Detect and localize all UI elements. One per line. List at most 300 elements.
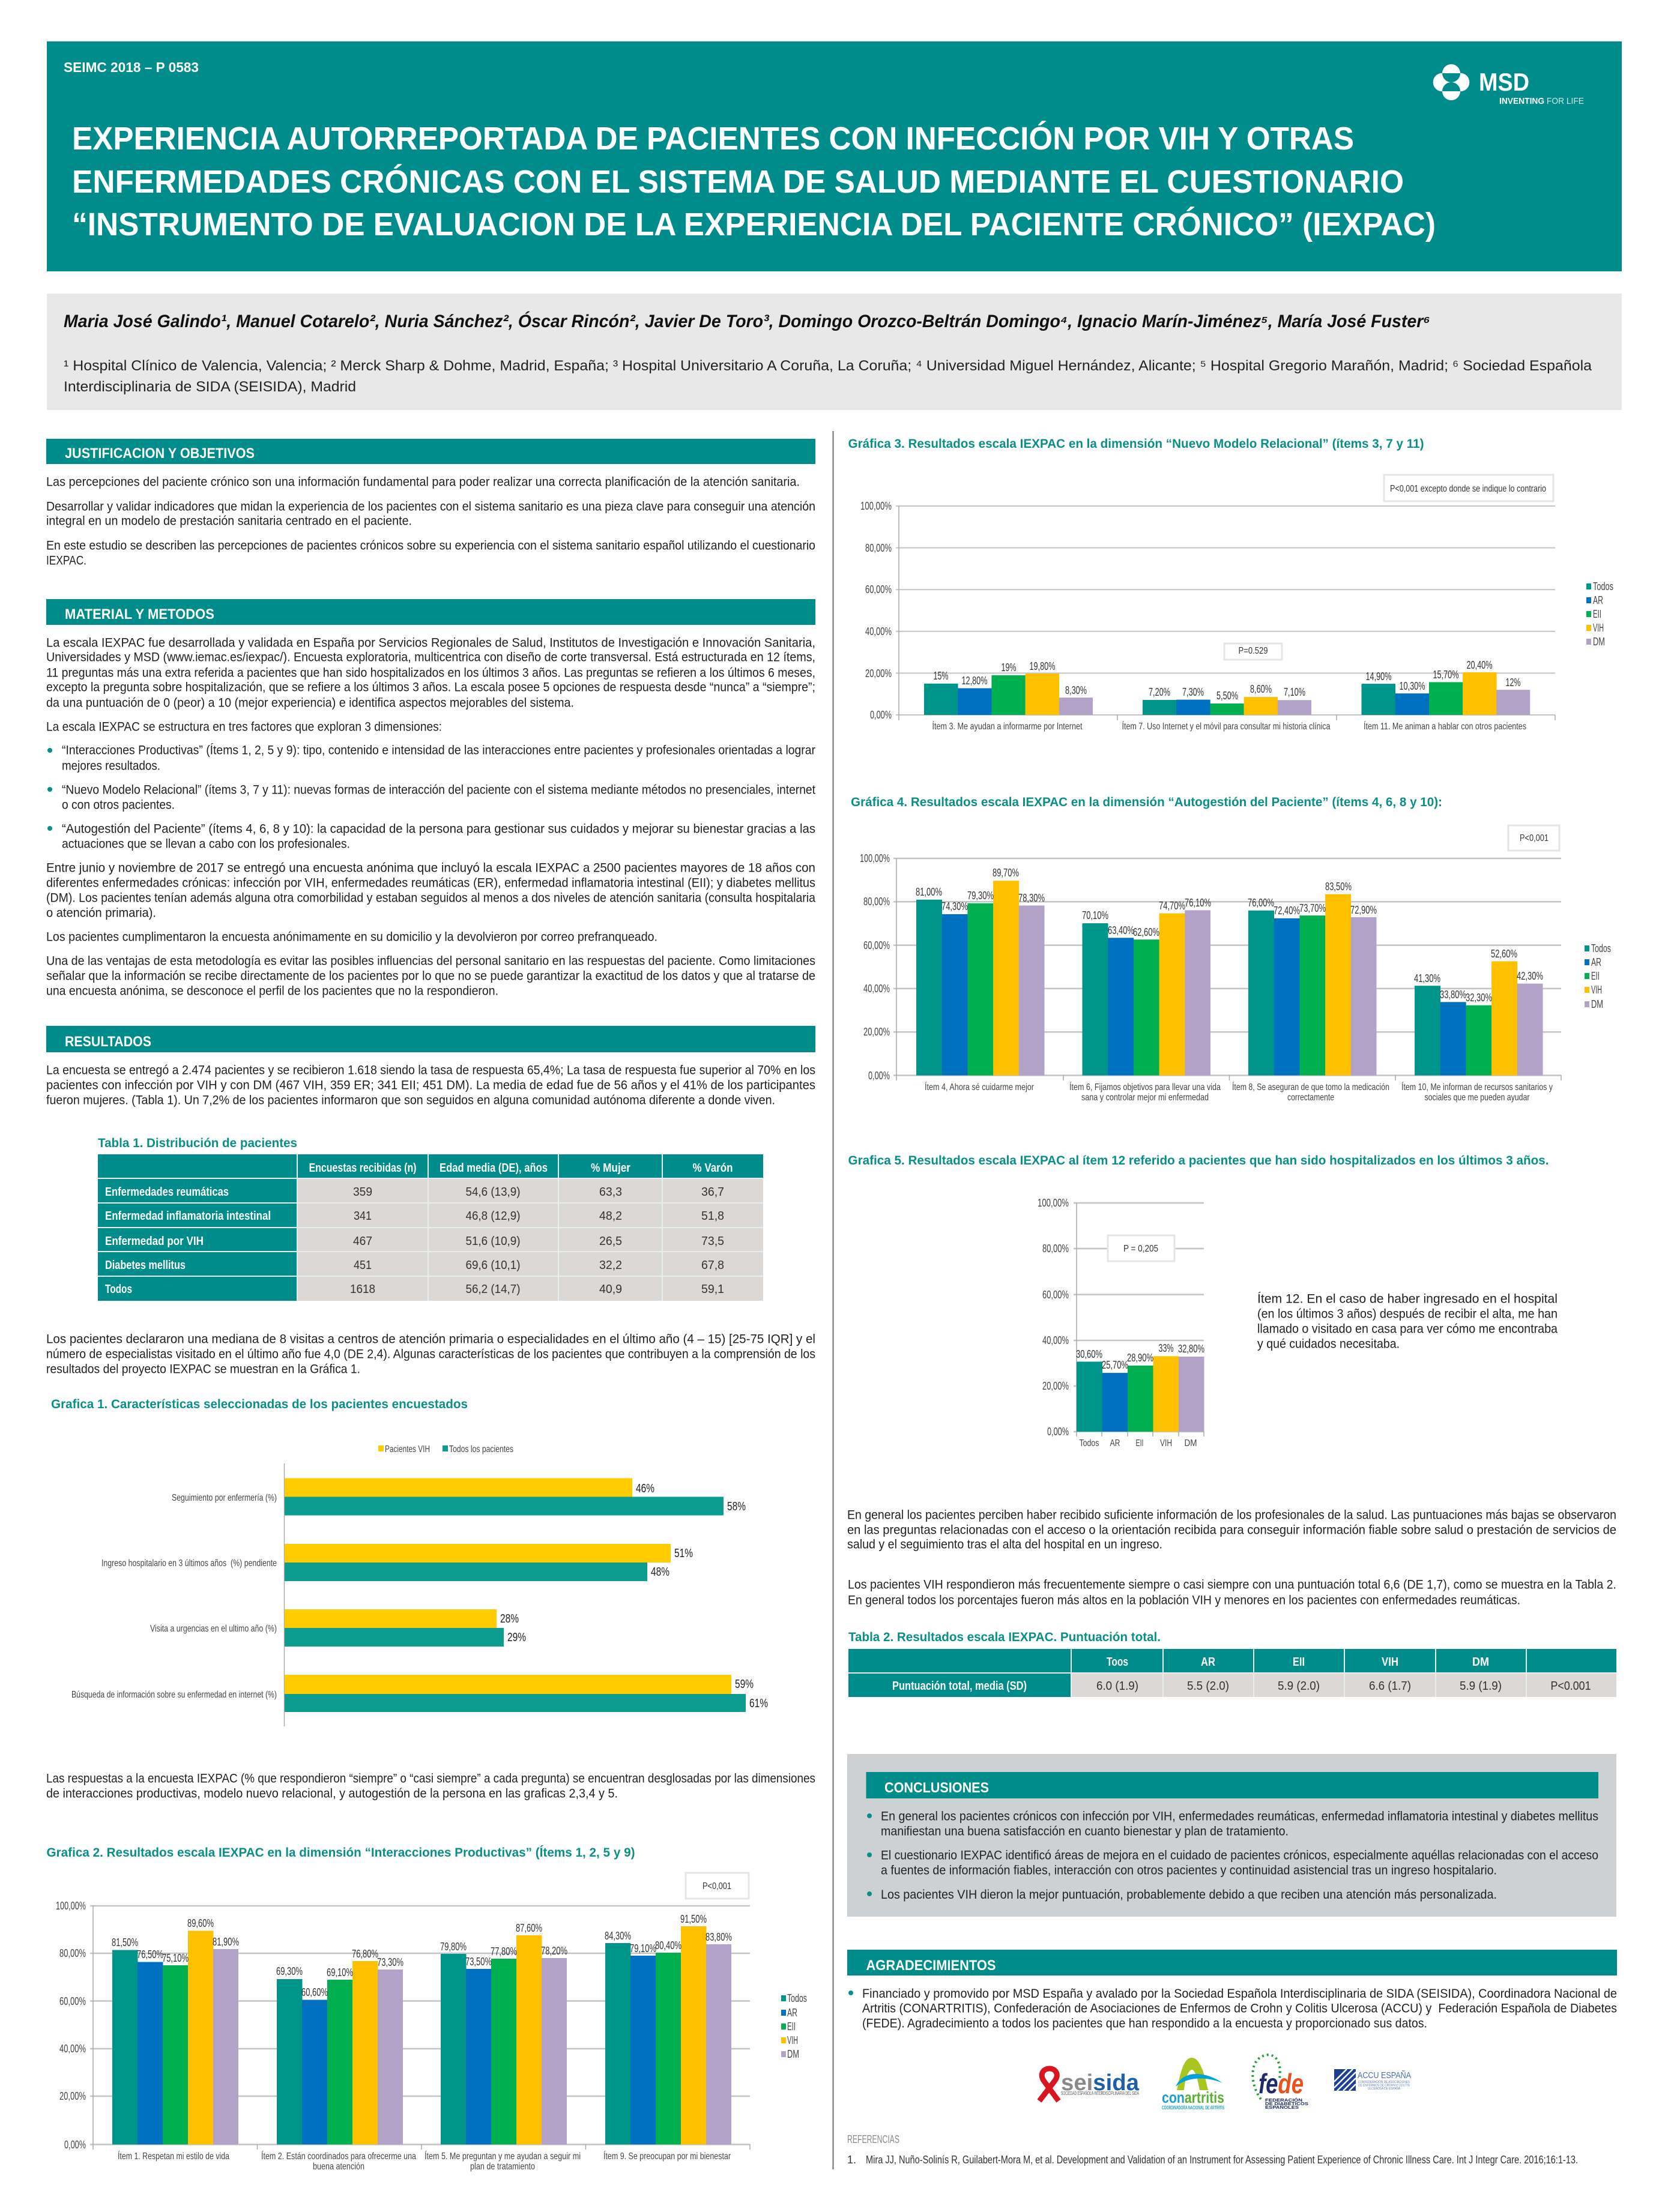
legend: AR bbox=[1591, 956, 1601, 968]
group: item 8: 73,70% bbox=[1299, 902, 1326, 914]
group: item 11: 15,70% bbox=[1433, 669, 1459, 681]
table 1: 26,5 bbox=[599, 1235, 622, 1248]
axes and grid: 100,00% bbox=[1038, 1197, 1069, 1209]
group: item 11 bbox=[1362, 659, 1530, 732]
legend bbox=[1585, 942, 1611, 1010]
acknowledgement text bbox=[848, 1987, 1617, 2030]
group: item 5: 79,80% bbox=[440, 1941, 467, 1953]
group: item 3: 19% bbox=[1002, 661, 1016, 674]
logo: accu españa: ACCU ESPAÑA bbox=[1358, 2070, 1411, 2081]
chart 2 title: Grafica 2. Resultados escala IEXPAC en la dimensión “Interacciones Productivas” (Ítems 1, 2, 5 y 9) bbox=[47, 1846, 635, 1860]
table 1: 467 bbox=[353, 1235, 372, 1248]
logo: seisida: SOCIEDAD ESPAÑOLA INTERDISCIPLINARIA DEL SIDA bbox=[1061, 2091, 1139, 2096]
group: item 10: 42,30% bbox=[1517, 970, 1543, 982]
table 2 bbox=[848, 1649, 1616, 1697]
bullet list: dimensions: “Nuevo Modelo Relacional” (ítems 3, 7 y 11): nuevas formas de interacción del paciente con el sistema mediante métodos no presenciales, internet bbox=[62, 783, 815, 797]
legend: EII bbox=[1593, 608, 1601, 620]
panel: resultados bbox=[46, 1026, 815, 1107]
category: internet bbox=[71, 1675, 768, 1712]
text: responses paragraph: Las respuestas a la encuesta IEXPAC (% que respondieron “siempre” o “casi siempre” a cada pregunta) se encuentran desglosadas por las dimensiones bbox=[46, 1772, 815, 1785]
group: item 2: 76,80% bbox=[352, 1948, 378, 1960]
conclusions bullets: manifiestan una buena satisfacción en cuanto bienestar y plan de tratamiento. bbox=[881, 1825, 1289, 1838]
chart 3 title: Gráfica 3. Resultados escala IEXPAC en la dimensión “Nuevo Modelo Relacional” (ítems 3, 7 y 11) bbox=[848, 437, 1424, 451]
axes and grid: 20,00% bbox=[1042, 1380, 1069, 1392]
text: results discussion: salud y el seguimiento tras el alta del hospital en un ingreso. bbox=[847, 1538, 1162, 1551]
group: item 10: sociales que me pueden ayudar bbox=[1424, 1092, 1530, 1103]
category: seguimiento: 46% bbox=[636, 1482, 654, 1495]
bullet list: dimensions bbox=[47, 743, 815, 851]
group: item 9: Ítem 9. Se preocupan por mi bienestar bbox=[603, 2150, 731, 2162]
body text: IEXPAC. bbox=[46, 553, 86, 568]
header banner bbox=[47, 41, 1622, 271]
p value box bbox=[686, 1873, 749, 1899]
group: item 9: 80,40% bbox=[655, 1939, 681, 1951]
acknowledgement text: (FEDE). Agradecimiento a todos los pacientes que han respondido a la encuesta y proporcionado sus datos. bbox=[862, 2017, 1427, 2030]
axes and grid: 60,00% bbox=[59, 1995, 86, 2007]
group: item 7: 5,50% bbox=[1216, 690, 1238, 702]
category: urgencias: 29% bbox=[507, 1631, 526, 1644]
panel: conclusiones bbox=[847, 1754, 1616, 1917]
body text: Desarrollar y validar indicadores que midan la experiencia de los pacientes con el sistema sanitario es una pieza clave para conseguir una atención bbox=[46, 499, 815, 514]
logo: accu españa: DE ENFERMOS DE CROHN Y COLITIS bbox=[1358, 2084, 1410, 2088]
group: item 5: plan de tratamiento bbox=[470, 2162, 535, 2172]
affiliations bbox=[64, 358, 1592, 395]
group: item 8 bbox=[1232, 881, 1389, 1103]
legend: DM bbox=[1593, 636, 1605, 648]
legend: Pacientes VIH bbox=[385, 1444, 430, 1454]
table 1: 359 bbox=[353, 1186, 372, 1199]
category: urgencias: 28% bbox=[500, 1612, 519, 1626]
group: item 3: 8,30% bbox=[1065, 684, 1087, 696]
body text: La encuesta se entregó a 2.474 pacientes y se recibieron 1.618 siendo la tasa de respuesta 65,4%; La tasa de respuesta fue superior al 70% en los bbox=[46, 1064, 815, 1077]
references bbox=[847, 2133, 1578, 2166]
category: seguimiento bbox=[172, 1478, 746, 1515]
references: REFERENCIAS bbox=[847, 2133, 899, 2145]
category: urgencias bbox=[150, 1609, 526, 1647]
group: item 5: 77,80% bbox=[491, 1945, 517, 1957]
table 1 title: Tabla 1. Distribución de pacientes bbox=[98, 1136, 297, 1150]
group: item 10: 52,60% bbox=[1491, 948, 1517, 960]
text: results discussion: Los pacientes VIH respondieron más frecuentemente siempre o casi siempre con una puntuación total 6,6 (DE 1,7), como se muestra en la Tabla 2. bbox=[848, 1578, 1616, 1592]
heading bbox=[866, 1772, 1598, 1798]
text: responses paragraph: de interacciones productivas, modelo nuevo relacional, y autogestión de la persona en las graficas 2,3,4 y 5. bbox=[46, 1786, 618, 1801]
text: results discussion: En general los pacientes perciben haber recibido suficiente información de los profesionales de la salud. Las puntuaciones más bajas se observaron bbox=[847, 1508, 1616, 1522]
group: item 11: 12% bbox=[1506, 677, 1520, 689]
group: item 5: 87,60% bbox=[516, 1922, 542, 1934]
table 1: 67,8 bbox=[701, 1259, 724, 1272]
group: item 4: 89,70% bbox=[993, 867, 1019, 879]
conclusions bullets: a fuentes de información fiables, interacción con otros pacientes y continuidad asistencial tras un ingreso hospitalario. bbox=[881, 1863, 1497, 1878]
axes and grid: 20,00% bbox=[59, 2090, 86, 2102]
p value box bbox=[1384, 475, 1553, 501]
group: item 2: 73,30% bbox=[377, 1956, 403, 1968]
logo: accu españa: ULCEROSA DE ESPAÑA bbox=[1368, 2087, 1400, 2091]
group: item 9: 83,80% bbox=[706, 1931, 732, 1943]
heading: MATERIAL Y METODOS bbox=[65, 606, 214, 622]
group: item 7: 7,10% bbox=[1284, 686, 1305, 698]
table 1: % Mujer bbox=[591, 1162, 630, 1175]
axes and grid bbox=[56, 1900, 750, 2151]
group: item 4: 79,30% bbox=[967, 890, 994, 902]
legend: DM bbox=[787, 2048, 799, 2060]
group: item 6: Ítem 6, Fijamos objetivos para llevar una vida bbox=[1069, 1081, 1221, 1092]
table 1: 56,2 (14,7) bbox=[466, 1283, 520, 1296]
panel: agradecimientos bbox=[847, 1950, 1617, 2030]
chart 4 bbox=[860, 825, 1611, 1103]
text: visits paragraph: número de especialistas visitado en el último año fue 4,0 (DE 2,4). Algunas características de los pacientes que contribuyen a la comprensión de los bbox=[46, 1347, 815, 1361]
group: item 6: 63,40% bbox=[1108, 924, 1134, 936]
methods paragraphs: una encuesta anónima, se desconoce el perfil de los pacientes que no la respondieron. bbox=[46, 984, 498, 998]
group: item 1: 81,50% bbox=[112, 1936, 138, 1948]
bars: AR bbox=[1110, 1438, 1120, 1448]
group: item 4 bbox=[916, 867, 1045, 1092]
axes and grid bbox=[860, 500, 1555, 721]
table 1: 36,7 bbox=[701, 1186, 724, 1199]
authors panel bbox=[47, 294, 1622, 410]
conference code: SEIMC 2018 – P 0583 bbox=[64, 59, 199, 75]
group: item 1: 75,10% bbox=[162, 1952, 189, 1964]
category: internet: Búsqueda de información sobre su enfermedad en internet (%) bbox=[71, 1690, 277, 1700]
group: item 5: Ítem 5. Me preguntan y me ayudan a seguir mi bbox=[425, 2150, 581, 2162]
legend: AR bbox=[787, 2007, 797, 2019]
logo: fede bbox=[1253, 2055, 1308, 2110]
group: item 10: 32,30% bbox=[1466, 992, 1492, 1004]
table 2: 5.5 (2.0) bbox=[1187, 1680, 1229, 1693]
group: item 2 bbox=[261, 1948, 416, 2172]
text: responses paragraph bbox=[46, 1772, 815, 1801]
bars: 25,70% bbox=[1102, 1359, 1128, 1371]
table 1: 54,6 (13,9) bbox=[466, 1186, 520, 1199]
table 1: 32,2 bbox=[599, 1259, 622, 1272]
p value box bbox=[1108, 1235, 1174, 1261]
legend: Todos los pacientes bbox=[449, 1444, 513, 1454]
group: item 1: 76,50% bbox=[137, 1948, 163, 1960]
table 1: 451 bbox=[354, 1259, 372, 1272]
legend: AR bbox=[1593, 594, 1603, 606]
table 2: 6.6 (1.7) bbox=[1369, 1680, 1411, 1693]
group: item 8: correctamente bbox=[1287, 1092, 1334, 1103]
table 1: Enfermedad inflamatoria intestinal bbox=[105, 1210, 271, 1223]
group: item 3 bbox=[924, 660, 1093, 732]
axes and grid: 40,00% bbox=[863, 983, 890, 995]
group: item 7 bbox=[1122, 683, 1331, 732]
axes and grid: 20,00% bbox=[863, 1026, 890, 1038]
table 1: Enfermedades reumáticas bbox=[105, 1186, 229, 1199]
body text: Las percepciones del paciente crónico son una información fundamental para poder realizar una correcta planificación de la atención sanitaria. bbox=[46, 475, 800, 489]
bullet list: dimensions: o con otros pacientes. bbox=[62, 798, 175, 812]
text: item 12 description bbox=[1257, 1292, 1558, 1351]
icon: MSD logo: INVENTING FOR LIFE bbox=[1499, 96, 1584, 106]
body text bbox=[46, 475, 815, 568]
body text: integral en un modelo de prestación sanitaria centrado en el paciente. bbox=[46, 514, 412, 528]
group: item 8: Ítem 8, Se aseguran de que tomo la medicación bbox=[1232, 1081, 1389, 1092]
text: visits paragraph bbox=[46, 1333, 815, 1376]
axes and grid: 40,00% bbox=[59, 2043, 86, 2055]
heading bbox=[46, 439, 815, 464]
heading: RESULTADOS bbox=[65, 1034, 151, 1050]
group: item 9: 91,50% bbox=[680, 1913, 707, 1925]
methods paragraphs: señalar que la información se recibe directamente de los pacientes por lo que no se puede garantizar la exactitud de los datos y que al tratarse de bbox=[46, 969, 815, 983]
legend: EII bbox=[787, 2021, 796, 2033]
table 2: AR bbox=[1201, 1656, 1215, 1669]
body text: pacientes con infección por VIH y con DM (467 VIH, 359 ER; 341 EII; 451 DM). La media de edad fue de 56 años y el 41% de los participantes bbox=[46, 1078, 815, 1092]
axes and grid: 80,00% bbox=[865, 542, 892, 554]
table 2: Toos bbox=[1107, 1656, 1128, 1669]
category: urgencias: Visita a urgencias en el ultimo año (%) bbox=[150, 1624, 277, 1634]
table 1: Enfermedad por VIH bbox=[105, 1235, 204, 1248]
body text: La escala IEXPAC fue desarrollada y validada en España por Servicios Regionales de Salud, Institutos de Investigación e Innovación Sanitaria, bbox=[46, 636, 815, 649]
group: item 10: 41,30% bbox=[1414, 972, 1440, 984]
axes and grid: 0,00% bbox=[868, 1070, 890, 1082]
group: item 3: Ítem 3. Me ayudan a informarme por Internet bbox=[932, 720, 1083, 732]
logo: accu españa: CONFEDERACIÓN DE ASOCIACIONES bbox=[1358, 2080, 1410, 2084]
group: item 10: 33,80% bbox=[1440, 989, 1466, 1001]
group: item 8: 72,40% bbox=[1274, 905, 1300, 917]
table 1: 59,1 bbox=[701, 1283, 724, 1296]
bullet list: dimensions: “Autogestión del Paciente” (ítems 4, 6, 8 y 10): la capacidad de la persona para gestionar sus cuidados y mejorar su bienestar gracias a las bbox=[62, 822, 815, 836]
p value box: P<0,001 bbox=[1520, 833, 1549, 843]
axes and grid: 20,00% bbox=[865, 668, 892, 680]
legend: Todos bbox=[787, 1992, 807, 2004]
group: item 4: Ítem 4, Ahora sé cuidarme mejor bbox=[925, 1081, 1035, 1092]
logo: fede: fede bbox=[1259, 2068, 1304, 2099]
title: ENFERMEDADES CRÓNICAS CON EL SISTEMA DE SALUD MEDIANTE EL CUESTIONARIO bbox=[72, 164, 1404, 200]
axes and grid: 0,00% bbox=[870, 709, 892, 721]
bars: 28,90% bbox=[1127, 1352, 1153, 1364]
heading bbox=[46, 599, 815, 625]
bullet list: dimensions: mejores resultados. bbox=[62, 759, 160, 773]
table 1: Diabetes mellitus bbox=[105, 1259, 186, 1272]
table 1: 40,9 bbox=[599, 1283, 622, 1296]
table 1: 48,2 bbox=[599, 1210, 622, 1223]
legend: Todos bbox=[1593, 580, 1613, 592]
legend bbox=[378, 1444, 513, 1454]
methods paragraphs: o atención primaria). bbox=[46, 906, 156, 920]
table 1: 51,8 bbox=[701, 1210, 724, 1223]
legend: Todos bbox=[1591, 942, 1611, 954]
chart 2 bbox=[56, 1873, 807, 2172]
group: item 5 bbox=[425, 1922, 581, 2172]
table 2: P<0.001 bbox=[1550, 1680, 1591, 1693]
chart 5 bbox=[1038, 1197, 1204, 1448]
bullet list: dimensions: actuaciones que se llevan a cabo con los profesionales. bbox=[62, 837, 350, 851]
table 1: Edad media (DE), años bbox=[440, 1162, 548, 1175]
bars bbox=[1076, 1342, 1204, 1448]
methods paragraphs: Los pacientes cumplimentaron la encuesta anónimamente en su domicilio y la devolvieron por correo prefranqueado. bbox=[46, 930, 657, 944]
group: item 9 bbox=[603, 1913, 732, 2162]
body text: fueron mujeres. (Tabla 1). Un 7,2% de los pacientes informaron que son seguidos en alguna comunidad autónoma diferente a donde viven. bbox=[46, 1094, 775, 1107]
p value box: P = 0,205 bbox=[1123, 1244, 1158, 1254]
heading: CONCLUSIONES bbox=[884, 1780, 989, 1796]
logo: fede: ESPAÑOLES bbox=[1265, 2105, 1299, 2110]
p value box: P<0,001 excepto donde se indique lo contrario bbox=[1390, 484, 1546, 494]
group: item 3: 19,80% bbox=[1029, 660, 1056, 672]
bars: 32,80% bbox=[1178, 1343, 1204, 1355]
acknowledgement text: Artritis (CONARTRITIS), Confederación de Asociaciones de Enfermos de Crohn y Colitis Ulcerosa (ACCU) y Federación Española de Diabetes bbox=[862, 2001, 1617, 2016]
text: item 12 description: (en los últimos 3 años) después de recibir el alta, me han bbox=[1257, 1307, 1558, 1321]
axes and grid: 40,00% bbox=[1042, 1334, 1069, 1346]
group: item 11: Ítem 11. Me animan a hablar con otros pacientes bbox=[1364, 720, 1526, 732]
group: item 1 bbox=[112, 1917, 239, 2162]
legend bbox=[781, 1992, 807, 2060]
group: item 7: 7,20% bbox=[1149, 686, 1170, 698]
axes and grid: 60,00% bbox=[863, 939, 890, 951]
group: item 6: 74,70% bbox=[1159, 900, 1185, 912]
title bbox=[72, 121, 1436, 243]
axes and grid bbox=[860, 852, 1561, 1082]
axes and grid: 60,00% bbox=[1042, 1289, 1069, 1301]
p value box: P<0,001 bbox=[703, 1881, 731, 1891]
category: ingreso: 48% bbox=[651, 1566, 669, 1579]
group: item 4: 81,00% bbox=[916, 886, 942, 898]
text: results discussion: En general todos los porcentajes fueron más altos en la población VIH y menores en los pacientes con enfermedades reumáticas. bbox=[848, 1593, 1520, 1608]
group: item 4: 74,30% bbox=[941, 900, 968, 912]
axes and grid: 80,00% bbox=[863, 896, 890, 908]
heading: JUSTIFICACION Y OBJETIVOS bbox=[65, 445, 255, 462]
group: item 11: 14,90% bbox=[1365, 671, 1392, 683]
group: item 2: buena atención bbox=[313, 2162, 364, 2172]
bars: DM bbox=[1184, 1438, 1197, 1448]
group: item 5: 73,50% bbox=[465, 1956, 492, 1968]
group: item 7: Ítem 7. Uso Internet y el móvil para consultar mi historia clínica bbox=[1122, 720, 1331, 732]
group: item 10 bbox=[1401, 948, 1553, 1103]
text: item 12 description: Ítem 12. En el caso de haber ingresado en el hospital bbox=[1257, 1292, 1558, 1306]
chart 1: horizontal bars bbox=[71, 1444, 768, 1726]
table 2: 5.9 (2.0) bbox=[1278, 1680, 1320, 1693]
conclusions bullets: Los pacientes VIH dieron la mejor puntuación, probablemente debido a que reciben una atención más personalizada. bbox=[881, 1888, 1497, 1902]
chart 5 title: Grafica 5. Resultados escala IEXPAC al ítem 12 referido a pacientes que han sido hospitalizados en los últimos 3 años. bbox=[848, 1154, 1549, 1168]
authors: Maria José Galindo¹, Manuel Cotarelo², Nuria Sánchez², Óscar Rincón², Javier De Toro³, Domingo Orozco-Beltrán Domingo⁴, Ignacio Marín-Jiménez⁵, María José Fuster⁶ bbox=[64, 311, 1430, 331]
heading: AGRADECIMIENTOS bbox=[866, 1957, 996, 1974]
conclusions bullets: El cuestionario IEXPAC identificó áreas de mejora en el cuidado de pacientes crónicos, especialmente aquéllas relacionadas con el acceso bbox=[881, 1849, 1598, 1862]
logo: conartritis bbox=[1162, 2058, 1224, 2111]
group: item 10: Ítem 10, Me informan de recursos sanitarios y bbox=[1401, 1081, 1553, 1092]
icon: MSD logo: MSD bbox=[1479, 68, 1529, 96]
methods paragraphs bbox=[46, 861, 815, 998]
group: item 7: 7,30% bbox=[1182, 686, 1204, 698]
p value box bbox=[1508, 825, 1559, 851]
affiliations: Interdisciplinaria de SIDA (SEISIDA), Madrid bbox=[64, 379, 356, 395]
table 1: Encuestas recibidas (n) bbox=[309, 1162, 417, 1175]
category: ingreso bbox=[101, 1544, 693, 1581]
icon: MSD logo bbox=[1433, 64, 1584, 106]
panel: justificacion y objetivos bbox=[46, 439, 815, 568]
group: item 3: 12,80% bbox=[962, 675, 987, 687]
group: item 9: 79,10% bbox=[630, 1942, 656, 1954]
legend: VIH bbox=[1593, 622, 1604, 634]
group: item 3: 15% bbox=[933, 670, 949, 682]
bars: EII bbox=[1136, 1438, 1143, 1448]
table 2: EII bbox=[1293, 1656, 1305, 1669]
table 2: 5.9 (1.9) bbox=[1460, 1680, 1502, 1693]
p value box item 7 bbox=[1224, 643, 1282, 660]
methods paragraphs: (DM). Los pacientes tenían además alguna otra comorbilidad y estaban seguidos al menos a dos niveles de atención sanitaria (consulta hospitalaria bbox=[46, 891, 815, 905]
title: EXPERIENCIA AUTORREPORTADA DE PACIENTES CON INFECCIÓN POR VIH Y OTRAS bbox=[72, 121, 1354, 157]
table 1: 341 bbox=[354, 1210, 372, 1223]
body text: 11 preguntas más una extra referida a pacientes que han sido hospitalizados en los últimos 3 años. Las preguntas se refieren a los últimos 6 meses, bbox=[46, 666, 815, 680]
axes and grid: 60,00% bbox=[865, 583, 892, 595]
legend: DM bbox=[1591, 998, 1603, 1010]
column divider bbox=[832, 431, 833, 2169]
group: item 1: Ítem 1. Respetan mi estilo de vida bbox=[118, 2150, 229, 2162]
body text: Universidades y MSD (www.iemac.es/iexpac/). Encuesta exploratoria, multicentrica con diseño de corte transversal. Está estructurada en 12 ítems, bbox=[46, 651, 815, 664]
methods paragraphs: Entre junio y noviembre de 2017 se entregó una encuesta anónima que incluyó la escala IEXPAC a 2500 pacientes mayores de 18 años con bbox=[46, 861, 815, 875]
group: item 2: 60,60% bbox=[301, 1986, 328, 1998]
group: item 1: 81,90% bbox=[213, 1936, 239, 1948]
group: item 6 bbox=[1069, 897, 1221, 1103]
group: item 8: 72,90% bbox=[1350, 904, 1377, 916]
axes and grid: 100,00% bbox=[860, 852, 890, 864]
body text bbox=[46, 1064, 815, 1107]
table 1: 73,5 bbox=[701, 1235, 724, 1248]
group: item 6: 76,10% bbox=[1185, 897, 1211, 909]
group: item 9: 84,30% bbox=[605, 1930, 631, 1942]
logo: seisida: seisida bbox=[1061, 2070, 1140, 2096]
axes and grid: 80,00% bbox=[1042, 1243, 1069, 1255]
logo: fede: DE DIABÉTICOS bbox=[1265, 2101, 1308, 2106]
group: item 11: 10,30% bbox=[1399, 680, 1425, 692]
group: item 4: 78,30% bbox=[1018, 892, 1045, 904]
panel: material y metodos bbox=[46, 599, 815, 998]
text: results discussion bbox=[847, 1508, 1616, 1608]
table 2: DM bbox=[1472, 1656, 1489, 1669]
text: item 12 description: y qué cuidados necesitaba. bbox=[1257, 1337, 1400, 1351]
chart 3 bbox=[860, 475, 1613, 732]
heading bbox=[847, 1950, 1617, 1975]
axes and grid: 80,00% bbox=[59, 1947, 86, 1959]
body text: da una puntuación de 0 (peor) a 10 (mejor experiencia) e identifica aspectos mejorables del sistema. bbox=[46, 696, 574, 710]
axes and grid: 40,00% bbox=[865, 625, 892, 637]
axes and grid: 100,00% bbox=[860, 500, 892, 512]
category: ingreso: 51% bbox=[674, 1547, 693, 1560]
logo: conartritis: COORDINADORA NACIONAL DE ARTRITIS bbox=[1162, 2105, 1224, 2111]
category: internet: 61% bbox=[749, 1697, 768, 1710]
legend: VIH bbox=[787, 2034, 798, 2046]
group: item 8: 83,50% bbox=[1325, 881, 1352, 893]
category: internet: 59% bbox=[735, 1678, 754, 1691]
methods paragraphs: Una de las ventajas de esta metodología es evitar las posibles influencias del personal sanitario en las respuestas del paciente. Como limitaciones bbox=[46, 954, 815, 968]
category: ingreso: Ingreso hospitalario en 3 últimos años (%) pendiente bbox=[101, 1558, 277, 1569]
bars: 33% bbox=[1159, 1342, 1173, 1354]
axes and grid: 100,00% bbox=[56, 1900, 86, 1912]
axes and grid: 0,00% bbox=[1047, 1426, 1069, 1438]
table 1: 1618 bbox=[350, 1283, 375, 1296]
affiliations: ¹ Hospital Clínico de Valencia, Valencia; ² Merck Sharp & Dohme, Madrid, España; ³ Hospital Universitario A Coruña, La Coruña; ⁴ Universidad Miguel Hernández, Alicante; ⁵ Hospital Gregorio Marañón, Madrid; ⁶ Sociedad Española bbox=[64, 358, 1592, 374]
group: item 11: 20,40% bbox=[1466, 659, 1493, 671]
category: seguimiento: 58% bbox=[727, 1500, 746, 1513]
table 1 bbox=[98, 1154, 763, 1301]
body text: excepto la pregunta sobre hospitalización, que se refiere a los últimos 3 años. La escala posee 5 opciones de respuesta desde “nunca” a “siempre”; bbox=[46, 681, 815, 694]
table 1: % Varón bbox=[693, 1162, 733, 1175]
heading bbox=[46, 1026, 815, 1052]
body text bbox=[46, 636, 815, 734]
bars: Todos bbox=[1080, 1438, 1099, 1448]
logo: accu españa bbox=[1334, 2069, 1411, 2091]
group: item 6: 70,10% bbox=[1082, 909, 1108, 921]
body text: En este estudio se describen las percepciones de pacientes crónicos sobre su experiencia con el sistema sanitario español utilizando el cuestionario bbox=[46, 539, 815, 552]
table 1: 63,3 bbox=[599, 1186, 622, 1199]
table 2: 6.0 (1.9) bbox=[1096, 1680, 1138, 1693]
logo: conartritis: conartritis bbox=[1162, 2088, 1224, 2106]
table 1: 51,6 (10,9) bbox=[466, 1235, 520, 1248]
table 1: 69,6 (10,1) bbox=[466, 1259, 520, 1272]
conclusions bullets bbox=[867, 1809, 1598, 1902]
chart 1 title: Grafica 1. Características seleccionadas de los pacientes encuestados bbox=[51, 1397, 468, 1411]
p value box item 7: P=0.529 bbox=[1238, 646, 1268, 656]
table 1: 46,8 (12,9) bbox=[466, 1210, 520, 1223]
title: “INSTRUMENTO DE EVALUACION DE LA EXPERIENCIA DEL PACIENTE CRÓNICO” (IEXPAC) bbox=[72, 206, 1436, 243]
body text: La escala IEXPAC se estructura en tres factores que exploran 3 dimensiones: bbox=[46, 720, 442, 734]
